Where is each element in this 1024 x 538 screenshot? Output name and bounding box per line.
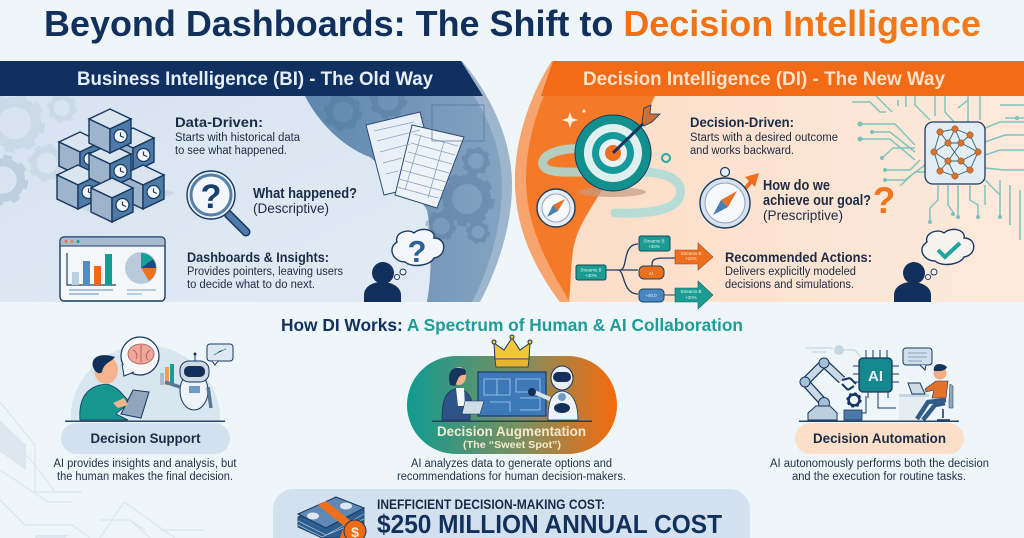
- icon: person with question: [364, 229, 444, 302]
- icon: person with check: [894, 229, 974, 302]
- description: [770, 458, 989, 483]
- icon: money stack: [298, 497, 366, 538]
- section: decision support: [54, 337, 237, 483]
- panel background: [515, 61, 1024, 302]
- description: AI autonomously performs both the decision: [770, 458, 989, 470]
- icon: decision flow: +30%: [685, 295, 697, 300]
- icon: person with question: ?: [408, 234, 426, 269]
- icon: data cubes: [57, 109, 175, 222]
- section: decision augmentation: [397, 335, 626, 483]
- header bar: BI: [0, 61, 483, 96]
- icon: decision flow: +40.0: [645, 293, 657, 298]
- description: and the execution for routine tasks.: [792, 471, 966, 483]
- text: dashboards: Provides pointers, leaving users: [187, 266, 343, 278]
- text: data-driven: Starts with historical data: [175, 132, 301, 144]
- icon: magnifier: [187, 171, 246, 232]
- gears background: [0, 95, 75, 202]
- text: data-driven: Data-Driven:: [175, 114, 263, 130]
- description: the human makes the final decision.: [57, 471, 233, 483]
- section: decision automation: [770, 345, 989, 483]
- icon: decision flow: +10%: [685, 256, 697, 261]
- icon: dashboard ghost: [432, 105, 484, 141]
- description: recommendations for human decision-makers.: [397, 471, 626, 483]
- text: what happened: [253, 186, 357, 216]
- title: Beyond Dashboards: The Shift to Decision Intelligence: [44, 3, 981, 44]
- description: [54, 458, 237, 483]
- label: Decision Augmentation: [437, 423, 586, 439]
- text: recommended actions: [725, 249, 872, 291]
- icon: decision flow: +30%: [585, 273, 597, 278]
- text: decision-driven: Starts with a desired outcome: [690, 132, 838, 144]
- label: Decision Automation: [813, 430, 946, 446]
- cost label: INEFFICIENT DECISION-MAKING COST:: [377, 496, 605, 512]
- background circuit pattern: [0, 402, 205, 538]
- label: Decision Support: [90, 430, 201, 446]
- icon: decision flow: Streams B: [680, 251, 702, 256]
- panel: decision intelligence: [515, 61, 1024, 309]
- heading: how DI works: How DI Works: A Spectrum of Human & AI Collaboration: [281, 315, 743, 335]
- text: what happened: What happened?: [253, 186, 357, 202]
- text: how do we: How do we: [763, 178, 830, 194]
- icon: orange question mark: ?: [873, 180, 895, 221]
- icon: magnifier: ?: [201, 178, 221, 216]
- description: AI provides insights and analysis, but: [54, 458, 237, 470]
- text: how do we: (Prescriptive): [763, 207, 843, 223]
- icon: decision flow: +30%: [648, 244, 660, 249]
- banner: cost: [273, 489, 750, 538]
- label pill: [795, 423, 964, 454]
- icon: decision flow: [576, 236, 713, 309]
- text: recommended actions: decisions and simulations.: [725, 279, 854, 291]
- text: data-driven: to see what happened.: [175, 145, 287, 157]
- icon: crown: [492, 335, 532, 367]
- text: decision-driven: Decision-Driven:: [690, 114, 794, 130]
- description: [397, 458, 626, 483]
- header bar: DI: [541, 61, 1024, 96]
- banner background: [273, 489, 750, 538]
- text: how do we: achieve our goal?: [763, 193, 871, 209]
- description: AI analyzes data to generate options and: [411, 458, 612, 470]
- text: how do we: [763, 178, 871, 223]
- text: recommended actions: Recommended Actions:: [725, 249, 872, 265]
- panel background: [0, 61, 512, 302]
- icon: robot arm, chip and worker: AI: [868, 368, 883, 385]
- icon: dashboard: [60, 237, 165, 301]
- icon: decision flow: Streams B: [580, 268, 602, 272]
- text: what happened: (Descriptive): [253, 200, 329, 216]
- text: dashboards: [187, 249, 343, 291]
- heading: DI: Decision Intelligence (DI) - The New Way: [583, 69, 945, 90]
- icon: human, blueprint, robot: [432, 366, 592, 422]
- label pill: [61, 423, 230, 454]
- text: recommended actions: Delivers explicitly modeled: [725, 266, 856, 278]
- icon: human and robot: [65, 337, 233, 422]
- pill background: [407, 356, 617, 454]
- text: decision-driven: and works backward.: [690, 145, 794, 157]
- text: data-driven: [175, 114, 301, 157]
- icon: neural chip with circuits: [852, 96, 1024, 240]
- text: dashboards: to decide what to do next.: [187, 279, 315, 291]
- text: dashboards: Dashboards & Insights:: [187, 249, 329, 265]
- icon: robot arm, chip and worker: [799, 345, 959, 422]
- icon: compass: [700, 168, 759, 228]
- heading: BI: Business Intelligence (BI) - The Old Way: [77, 69, 433, 90]
- icon: decision flow: AI: [649, 271, 653, 276]
- icon: spreadsheets: [366, 112, 464, 208]
- icon: target with arrow: [543, 105, 680, 213]
- sublabel: (The “Sweet Spot”): [463, 439, 561, 451]
- panel: business intelligence: [0, 61, 512, 302]
- text: decision-driven: [690, 114, 838, 157]
- icon: decision flow: Streams B: [680, 289, 702, 294]
- icon: small compass: [537, 189, 575, 227]
- icon: decision flow: Streams B: [643, 238, 665, 244]
